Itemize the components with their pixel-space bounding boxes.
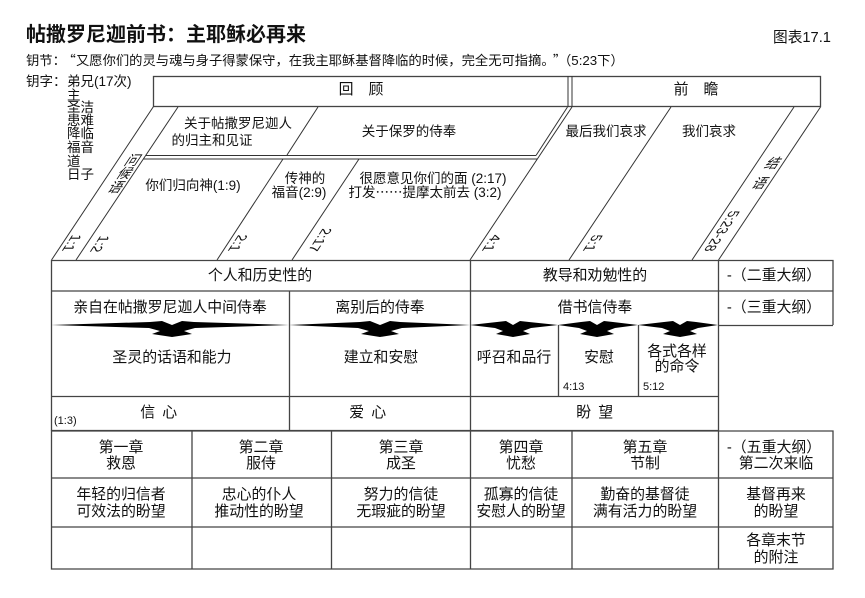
panel: main outline table: -（三重大纲） [727, 299, 821, 316]
panel: slanted book sections: 最后我们哀求 [566, 124, 647, 139]
panel: slanted book sections [52, 106, 820, 260]
panel: chapter table: 的附注 [754, 549, 798, 566]
key words: 主 [67, 88, 80, 103]
heading: preview: 前 瞻 [674, 81, 718, 98]
panel: chapter table: 忠心的仆人 [222, 486, 296, 503]
key words: 福音 [67, 139, 94, 155]
panel: chapter table: 第三章 [379, 438, 423, 456]
panel: chapter table: 服侍 [246, 455, 276, 472]
panel: survey header bar [154, 76, 820, 107]
panel: main outline table [51, 260, 833, 431]
panel: slanted book sections: 你们归向神(1:9) [145, 177, 241, 193]
title: 帖撒罗尼迦前书：主耶稣必再来 [26, 23, 306, 46]
heading: review: 回 顾 [339, 81, 383, 98]
panel: slanted book sections: 我们哀求 [682, 124, 736, 139]
panel: slanted book sections: 福音(2:9) [272, 184, 326, 200]
panel: chapter table: 的盼望 [754, 503, 798, 520]
panel: chapter table: 成圣 [386, 455, 416, 472]
panel: main outline table: 5:12 [643, 381, 664, 393]
key verse: “ [62, 50, 76, 69]
verse references: 4:1 [477, 235, 505, 251]
chapter themes: 年轻的归信者 [76, 486, 166, 503]
panel: chapter table: 满有活力的盼望 [593, 503, 697, 520]
key words: 道 [67, 154, 80, 169]
panel: chapter table: 各章末节 [746, 531, 806, 549]
key verse: 钥节： [26, 53, 66, 68]
slanted label: conclusion: 语 [748, 176, 772, 192]
panel: main outline table: (1:3) [54, 415, 77, 427]
panel: chapter table: 第四章 [499, 438, 543, 456]
key verse: （5:23下） [558, 53, 624, 68]
panel: main outline table: 爱 心 [349, 404, 388, 421]
panel: main outline table: 建立和安慰 [344, 348, 418, 366]
panel: slanted book sections: 打发……提摩太前去 (3:2) [348, 181, 502, 201]
panel: main outline table: 离别后的侍奉 [335, 299, 425, 316]
panel: main outline table: 各式各样 [647, 343, 707, 360]
panel: chapter table: 忧愁 [506, 455, 536, 472]
verse references: 5:1 [578, 235, 606, 251]
panel: slanted book sections: 的归主和见证 [172, 132, 252, 148]
verse references: 5:23-28 [699, 211, 743, 251]
panel: chapter table: 努力的信徒 [364, 486, 438, 503]
panel: main outline table: 盼 望 [576, 404, 615, 421]
verse references: 1:2 [85, 236, 113, 252]
slanted label: greeting: 语 [104, 180, 128, 196]
slanted label: greeting [104, 153, 145, 196]
row: three-fold outline: 亲自在帖撒罗尼迦人中间侍奉 [73, 299, 267, 316]
panel: chapter table: 孤寡的信徒 [484, 485, 558, 503]
key words: 患难 [67, 113, 94, 128]
slanted label: conclusion [748, 156, 785, 192]
verse references: 2:1 [223, 235, 251, 251]
panel: chapter table: 救恩 [106, 455, 136, 472]
panel: chapter table: 第二次来临 [739, 454, 813, 472]
chart number: 图表17.1 [773, 29, 831, 46]
slanted label: greeting: 候 [113, 166, 137, 182]
key verse: 又愿你们的灵与魂与身子得蒙保守，在我主耶稣基督降临的时候，完全无可指摘。 [76, 52, 555, 68]
panel: chapter table: 基督再来 [746, 486, 806, 503]
panel: chapter table [52, 431, 833, 569]
panel: chapter table: 节制 [630, 455, 660, 472]
key words: 日子 [67, 167, 94, 182]
key words [26, 74, 132, 182]
panel: main outline table: 的命令 [655, 357, 699, 375]
panel: main outline table: 4:13 [563, 381, 584, 393]
panel: chapter table: -（五重大纲） [727, 439, 821, 456]
panel: chapter table: 安慰人的盼望 [476, 502, 566, 520]
panel: main outline table: 借书信侍奉 [558, 299, 632, 316]
verse references: 2:17 [303, 228, 335, 252]
row: two-fold outline: 个人和历史性的 [208, 267, 312, 284]
arrows [51, 321, 718, 337]
key words: 圣洁 [67, 100, 94, 115]
key verse: ” [553, 50, 566, 69]
row: themes: 圣灵的话语和能力 [112, 349, 232, 366]
key words: 降临 [67, 126, 94, 141]
verse references: 1:1 [57, 235, 85, 251]
panel: main outline table: -（二重大纲） [727, 267, 821, 284]
slanted label: conclusion: 结 [761, 156, 785, 172]
panel: chapter table: 无瑕疵的盼望 [356, 503, 446, 520]
panel: slanted book sections: 很愿意见你们的面 (2:17) [359, 170, 507, 186]
panel: chapter table: 推动性的盼望 [214, 503, 304, 520]
panel: chapter table: 可效法的盼望 [76, 503, 166, 520]
panel: slanted book sections: 关于保罗的侍奉 [362, 124, 457, 139]
chapter headings: 第一章 [99, 438, 143, 456]
slanted label: greeting: 问 [121, 153, 145, 169]
panel: main outline table: 教导和劝勉性的 [543, 267, 647, 284]
key words: 弟兄(17次) [67, 74, 132, 89]
row: virtues: 信 心 [140, 404, 179, 421]
section text: 关于帖撒罗尼迦人 [184, 116, 292, 131]
verse references [57, 211, 743, 252]
key words: 钥字： [26, 74, 66, 89]
panel: chapter table: 第五章 [623, 438, 667, 456]
panel: main outline table: 安慰 [584, 348, 614, 366]
panel: chapter table: 勤奋的基督徒 [600, 486, 690, 503]
panel: slanted book sections: 传神的 [285, 171, 325, 186]
panel: chapter table: 第二章 [239, 438, 283, 456]
panel: main outline table: 呼召和品行 [477, 349, 551, 366]
